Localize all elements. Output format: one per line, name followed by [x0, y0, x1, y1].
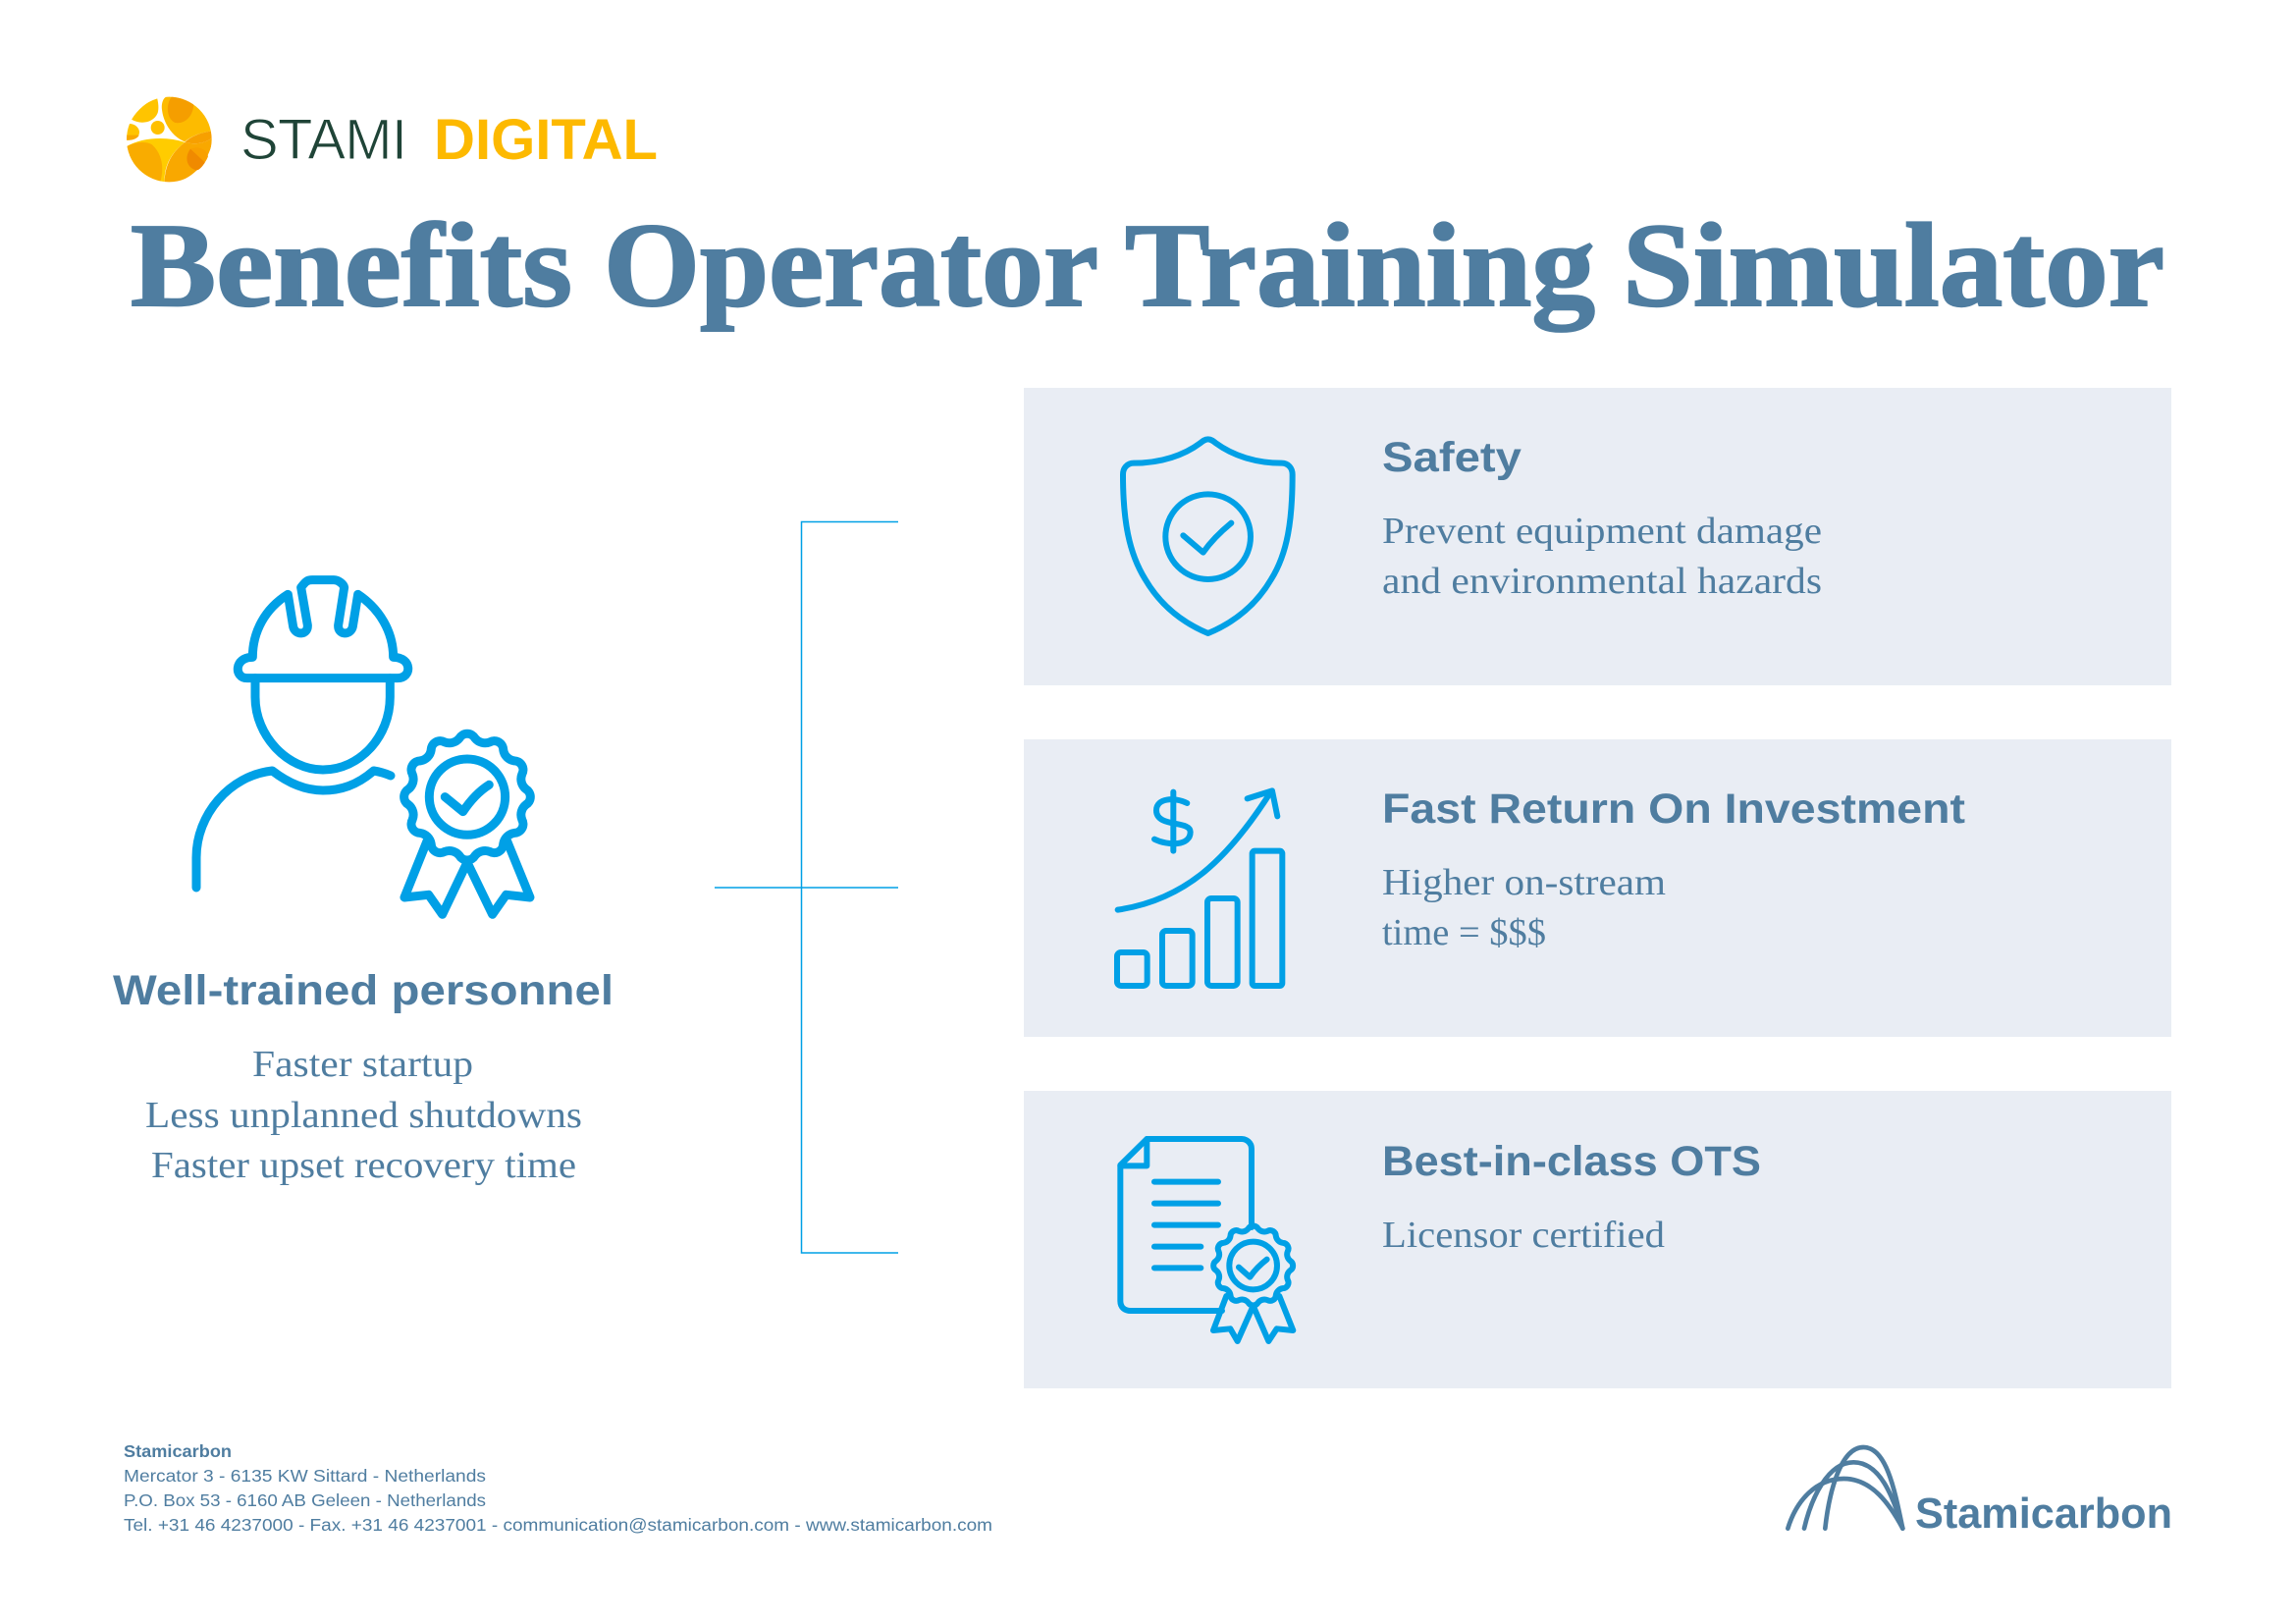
title: Benefits [131, 199, 572, 332]
icon: Stami ball [127, 96, 213, 184]
text: safety description: and environmental hazards [1382, 561, 1822, 602]
icon: growth chart with dollar [1117, 790, 1282, 986]
heading: safety: Safety [1382, 434, 1522, 481]
heading: well-trained personnel: Well-trained personnel [113, 967, 614, 1014]
title: Operator [604, 199, 1098, 332]
heading: fast return on investment: Fast Return On Investment [1382, 785, 1965, 833]
footer contact block: Stamicarbon [124, 1441, 232, 1461]
text: benefits list: Less unplanned shutdowns [145, 1095, 582, 1136]
icon: Stamicarbon arches [1788, 1447, 1902, 1529]
text: safety description: Prevent equipment damage [1382, 511, 1822, 552]
logo word: STAMI: STAMI [240, 108, 407, 172]
logo word: DIGITAL: DIGITAL [434, 108, 658, 172]
heading: best-in-class OTS: Best-in-class OTS [1382, 1138, 1761, 1185]
footer contact block: P.O. Box 53 - 6160 AB Geleen - Netherlands [124, 1490, 486, 1510]
footer contact block: Mercator 3 - 6135 KW Sittard - Netherlands [124, 1466, 486, 1486]
text: ROI description: time = $$$ [1382, 912, 1546, 953]
logo word: Stamicarbon: Stamicarbon [1915, 1489, 2172, 1538]
logo: Stamicarbon [1788, 1447, 2172, 1538]
text: OTS description: Licensor certified [1382, 1215, 1665, 1256]
logo: Stami Digital [127, 96, 658, 184]
title: Simulator [1623, 199, 2164, 332]
footer contact block [124, 1441, 992, 1535]
panel: best-in-class OTS [1024, 1091, 2171, 1388]
text: ROI description [1382, 862, 1666, 953]
connector bracket [715, 522, 898, 1253]
panel: fast return on investment [1024, 739, 2171, 1037]
text: benefits list [145, 1044, 582, 1186]
title [131, 199, 2164, 332]
text: benefits list: Faster upset recovery time [151, 1145, 576, 1186]
icon: shield with check [1123, 439, 1293, 633]
panel: safety [1024, 388, 2171, 685]
text: benefits list: Faster startup [252, 1044, 473, 1085]
infographic page [113, 96, 2171, 1534]
icon: certified document [1120, 1139, 1293, 1341]
panel: well-trained personnel [113, 580, 614, 1186]
footer contact block: Tel. +31 46 4237000 - Fax. +31 46 4237001 - communication@stamicarbon.com - www.stamicarbon.com [124, 1515, 992, 1535]
text: safety description [1382, 511, 1822, 602]
title: Training [1125, 199, 1595, 332]
icon: worker with rosette [196, 580, 530, 914]
text: ROI description: Higher on-stream [1382, 862, 1666, 903]
